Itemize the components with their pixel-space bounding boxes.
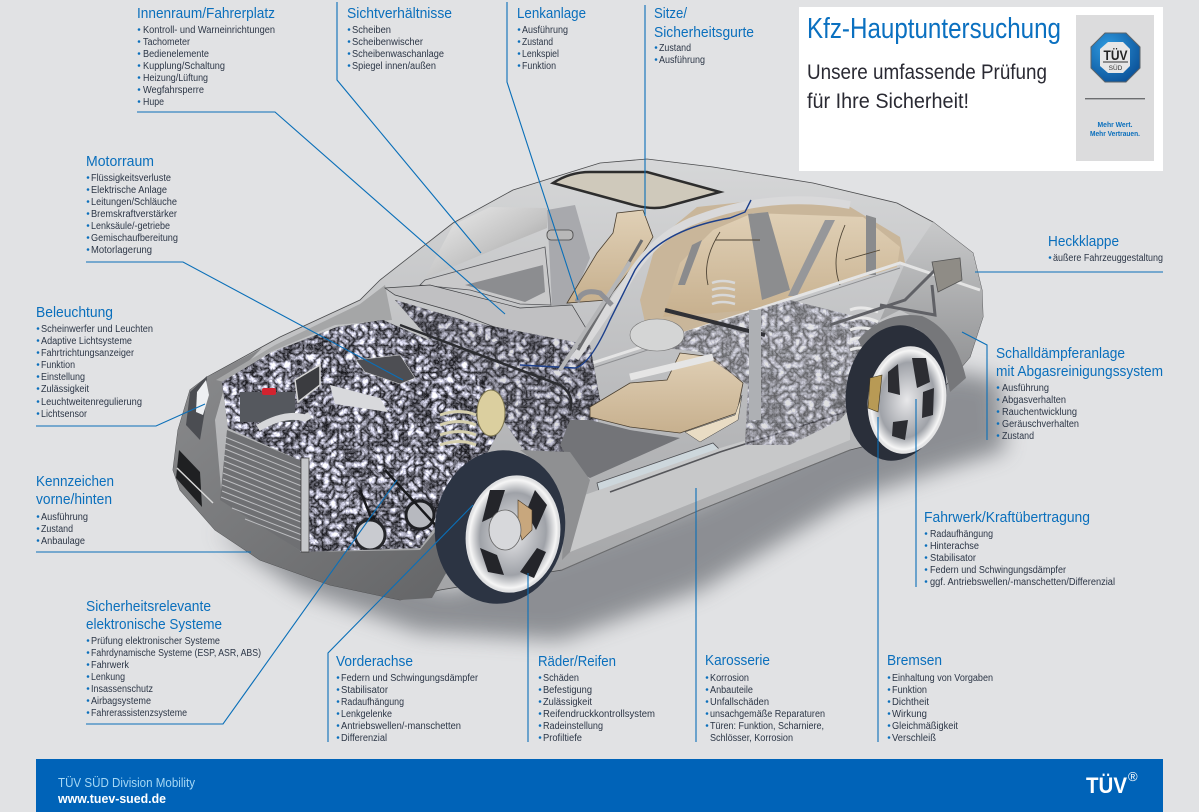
panel: Räder/Reifen: Befestigung — [543, 685, 592, 696]
panel: Schalldämpferanlage: Abgasverhalten — [1002, 395, 1066, 406]
panel: Lenkanlage — [517, 6, 586, 72]
rear rim — [862, 342, 952, 458]
panel: Sicherheitsrelevante elektronische Systeme: Fahrwerk — [91, 660, 130, 671]
panel: Innenraum/Fahrerplatz: Heizung/Lüftung — [143, 73, 208, 84]
panel: Fahrwerk/Kraftübertragung: Stabilisator — [930, 553, 977, 564]
floor pan — [560, 420, 680, 478]
radiator — [220, 430, 304, 552]
white box — [799, 7, 1163, 171]
panel: Fahrwerk/Kraftübertragung: Hinterachse — [930, 541, 979, 552]
panel: Motorraum: Flüssigkeitsverluste — [91, 173, 171, 184]
heading: Karosserie — [705, 653, 770, 669]
rocker cover — [356, 355, 415, 384]
intake pipe — [258, 415, 310, 428]
registered mark: ® — [1128, 769, 1138, 784]
panel: Beleuchtung: Scheinwerfer und Leuchten — [41, 324, 153, 335]
division text: TÜV SÜD Division Mobility — [58, 775, 195, 790]
near side mirror — [630, 319, 684, 351]
heading line 2: vorne/hinten — [36, 492, 112, 508]
panel: Innenraum/Fahrerplatz: Hupe — [143, 97, 164, 108]
panel: Räder/Reifen: Schäden — [543, 673, 579, 684]
front air intake — [176, 450, 202, 507]
panel: Sichtverhältnisse — [347, 6, 452, 72]
panel: Beleuchtung: Zulässigkeit — [41, 384, 89, 395]
panel: Beleuchtung: Fahrtrichtungsanzeiger — [41, 348, 135, 359]
seat base trim — [685, 395, 742, 442]
panel: Sichtverhältnisse: Spiegel innen/außen — [352, 61, 436, 72]
rear spoke openings — [888, 358, 934, 440]
rear greenhouse opening — [640, 198, 905, 345]
side skirt — [570, 410, 850, 552]
heading line 1: Kennzeichen — [36, 474, 114, 490]
car ground shadow — [215, 370, 1005, 640]
front wheel — [425, 442, 575, 612]
panel: Sicherheitsrelevante elektronische Systeme: Fahrerassistenzsysteme — [91, 708, 187, 719]
panel: Karosserie: Türen: Funktion, Scharniere, — [710, 721, 824, 732]
panel: Vorderachse: Lenkgelenke — [341, 709, 392, 720]
heading line 1: Sitze/ — [654, 6, 688, 22]
dashboard — [385, 285, 590, 350]
heading line 2: mit Abgasreinigungssystem — [996, 364, 1163, 380]
panel: Bremsen: Dichtheit — [892, 697, 929, 708]
heading: Vorderachse — [336, 654, 413, 670]
propeller tube — [630, 357, 713, 377]
near front seat — [590, 353, 743, 433]
rear quarter panel — [880, 222, 983, 383]
panel: Beleuchtung: Funktion — [41, 360, 75, 371]
panel: Räder/Reifen — [538, 654, 655, 744]
panel: Karosserie: Korrosion — [710, 673, 749, 684]
front bumper and nose — [173, 348, 480, 600]
footer band — [36, 759, 1163, 812]
panel: Innenraum/Fahrerplatz: Kontroll- und Warneinrichtungen — [143, 25, 275, 36]
panel: Bremsen: Verschleiß — [892, 733, 936, 744]
claim line 2: Mehr Vertrauen. — [1090, 131, 1140, 138]
alternator pulley — [355, 520, 385, 550]
hood rim — [216, 285, 392, 382]
icon: TÜV SÜD octagon logo — [1091, 33, 1140, 82]
panel: Sichtverhältnisse: Scheiben — [352, 25, 391, 36]
front tyre — [425, 442, 575, 612]
cowl texture — [395, 300, 600, 452]
panel: Sicherheitsrelevante elektronische Systeme — [86, 599, 261, 719]
panel: Schalldämpferanlage: Ausführung — [1002, 383, 1049, 394]
front spoke openings — [480, 490, 547, 578]
heading line 2: Sicherheitsgurte — [654, 25, 754, 41]
A pillar and blue cable — [520, 200, 850, 370]
panel: Schalldämpferanlage: Zustand — [1002, 431, 1034, 442]
far door inset — [465, 265, 545, 302]
panel: Heckklappe — [1048, 234, 1163, 264]
panel: Sitze/Sicherheitsgurte — [654, 6, 754, 66]
panel: Motorraum: Bremskraftverstärker — [91, 209, 178, 220]
panel: Fahrwerk/Kraftübertragung: Federn und Schwingungsdämpfer — [930, 565, 1067, 576]
icon: TÜV SÜD octagon logo: SÜD — [1109, 64, 1123, 72]
panel: Sicherheitsrelevante elektronische Systeme: Insassenschutz — [91, 684, 153, 695]
panel: Sicherheitsrelevante elektronische Systeme: Prüfung elektronischer Systeme — [91, 636, 220, 647]
divider — [1085, 98, 1145, 99]
panel: Motorraum: Elektrische Anlage — [91, 185, 167, 196]
drive belt — [360, 470, 440, 530]
far pillar — [547, 205, 590, 305]
headlight glass — [196, 380, 209, 415]
panel: Karosserie: Schlösser, Korrosion — [710, 733, 793, 744]
panel: Bremsen: Gleichmäßigkeit — [892, 721, 958, 732]
panel: Karosserie: Anbauteile — [710, 685, 753, 696]
panel: Bremsen: Einhaltung von Vorgaben — [892, 673, 993, 684]
panel: Fahrwerk/Kraftübertragung — [924, 510, 1115, 588]
panel: Vorderachse: Antriebswellen/-manschetten — [341, 721, 461, 732]
car body silhouette — [173, 159, 983, 600]
heading: Heckklappe — [1048, 234, 1119, 250]
heading: Räder/Reifen — [538, 654, 616, 670]
lower body edge — [562, 450, 850, 570]
exhaust link — [830, 270, 935, 325]
panel: Kennzeichen: Ausführung — [41, 512, 88, 523]
panel: Sitze/Sicherheitsgurte: Zustand — [659, 43, 691, 54]
steering wheel — [577, 292, 612, 305]
panel: Bremsen: Funktion — [892, 685, 927, 696]
panel: Räder/Reifen: Reifendruckkontrollsystem — [543, 709, 655, 720]
panel: Beleuchtung: Lichtsensor — [41, 409, 88, 420]
panel: Kennzeichen — [36, 474, 114, 547]
centre cross member — [749, 310, 761, 420]
rear seats — [663, 213, 900, 317]
panel: Räder/Reifen: Profiltiefe — [543, 733, 582, 744]
panel: Vorderachse: Federn und Schwingungsdämpfer — [341, 673, 479, 684]
far drive shaft — [665, 310, 765, 335]
rear coil spring — [850, 308, 878, 352]
heading: Motorraum — [86, 154, 154, 170]
middle running gear — [672, 300, 880, 445]
panel: Schalldämpferanlage — [996, 346, 1163, 442]
panel: Beleuchtung — [36, 305, 153, 420]
panel: Heckklappe: äußere Fahrzeuggestaltung — [1053, 253, 1163, 264]
front hub — [489, 510, 521, 550]
panel: Räder/Reifen: Zulässigkeit — [543, 697, 592, 708]
front strut spring — [440, 412, 476, 445]
panel: Schalldämpferanlage: Geräuschverhalten — [1002, 419, 1079, 430]
cylinder head — [330, 385, 388, 412]
panel: Sicherheitsrelevante elektronische Systeme: Fahrdynamische Systeme (ESP, ASR, ABS) — [91, 648, 261, 659]
logo panel — [1076, 15, 1154, 161]
panel: Bremsen — [887, 653, 993, 744]
website: www.tuev-sued.de — [57, 791, 166, 806]
heading: Sichtverhältnisse — [347, 6, 452, 22]
panel: Bremsen: Wirkung — [892, 709, 927, 720]
panel: Sichtverhältnisse: Scheibenwischer — [352, 37, 424, 48]
subtitle line 2: für Ihre Sicherheit! — [807, 90, 969, 113]
panel: Sitze/Sicherheitsgurte: Ausführung — [659, 55, 705, 66]
panel: Beleuchtung: Adaptive Lichtsysteme — [41, 336, 132, 347]
heading line 1: Sicherheitsrelevante — [86, 599, 211, 615]
panel: Kennzeichen: Anbaulage — [41, 536, 85, 547]
panel: Sicherheitsrelevante elektronische Systeme: Airbagsysteme — [91, 696, 151, 707]
title: Kfz-Hauptuntersuchung — [807, 13, 1061, 45]
windscreen and far side glass — [425, 207, 547, 278]
panel: Fahrwerk/Kraftübertragung: Radaufhängung — [930, 529, 993, 540]
beltline trim — [580, 263, 980, 367]
panel: Innenraum/Fahrerplatz — [137, 6, 275, 108]
panel: Motorraum: Gemischaufbereitung — [91, 233, 178, 244]
heading: Innenraum/Fahrerplatz — [137, 6, 275, 22]
rear brake caliper — [868, 375, 882, 412]
running gear texture — [672, 300, 880, 445]
battery — [240, 392, 295, 422]
footer background — [36, 759, 1163, 812]
engine bay — [215, 315, 510, 555]
panel: Karosserie: Unfallschäden — [710, 697, 769, 708]
side skirt line — [610, 412, 845, 492]
panel: Vorderachse: Stabilisator — [341, 685, 389, 696]
battery cap — [262, 388, 276, 395]
cowl and firewall mechanics — [395, 300, 600, 452]
heading: Lenkanlage — [517, 6, 586, 22]
cowl base — [395, 300, 600, 452]
panel: Lenkanlage: Funktion — [522, 61, 556, 72]
panel: title box — [799, 7, 1163, 171]
radiator fins — [221, 437, 304, 541]
front fender — [520, 450, 590, 560]
panel: Beleuchtung: Leuchtweitenregulierung — [41, 397, 142, 408]
panel: Lenkanlage: Zustand — [522, 37, 553, 48]
belt pulley — [406, 501, 434, 529]
far door panel — [420, 247, 551, 305]
footer TÜV wordmark: TÜV — [1086, 773, 1127, 798]
icon: TÜV SÜD octagon logo: TÜV — [1104, 47, 1128, 63]
panel: Innenraum/Fahrerplatz: Tachometer — [143, 37, 191, 48]
rear tyre — [837, 319, 955, 467]
headlight — [186, 376, 207, 440]
panel: Motorraum: Motorlagerung — [91, 245, 152, 256]
panel: Innenraum/Fahrerplatz: Wegfahrsperre — [143, 85, 204, 96]
rear wheel arch — [858, 315, 966, 392]
far suspension — [712, 281, 735, 304]
panel: Fahrwerk/Kraftübertragung: ggf. Antriebswellen/-manschetten/Differenzial — [930, 577, 1115, 588]
lower bumper trim — [177, 468, 213, 503]
seat belts and pillar — [678, 212, 880, 300]
interior mirror — [547, 230, 573, 240]
claim line 1: Mehr Wert. — [1098, 122, 1133, 129]
panel: Vorderachse — [336, 654, 479, 744]
tail lamp unit — [932, 258, 962, 292]
panel: Räder/Reifen: Radeinstellung — [543, 721, 603, 732]
panel: Kennzeichen: Zustand — [41, 524, 73, 535]
panel: Vorderachse: Radaufhängung — [341, 697, 404, 708]
panel: Lenkanlage: Ausführung — [522, 25, 568, 36]
heading line 1: Schalldämpferanlage — [996, 346, 1125, 362]
radiator support post — [301, 458, 309, 552]
heading: Fahrwerk/Kraftübertragung — [924, 510, 1090, 526]
panel: Schalldämpferanlage: Rauchentwicklung — [1002, 407, 1077, 418]
rear wheel — [837, 319, 955, 467]
panel: Motorraum: Lenksäule/-getriebe — [91, 221, 170, 232]
panel: Motorraum — [86, 154, 178, 256]
engine dark base — [215, 315, 510, 555]
front brake caliper — [518, 500, 532, 540]
brake booster pulley — [477, 390, 505, 436]
door sill — [597, 443, 720, 495]
panel: Sichtverhältnisse: Scheibenwaschanlage — [352, 49, 444, 60]
air duct — [295, 365, 320, 402]
panel: Motorraum: Leitungen/Schläuche — [91, 197, 177, 208]
front rim — [458, 469, 568, 599]
panel: Innenraum/Fahrerplatz: Kupplung/Schaltung — [143, 61, 225, 72]
illustration: cutaway car — [173, 159, 1005, 640]
far front seat — [567, 210, 653, 303]
subtitle line 1: Unsere umfassende Prüfung — [807, 61, 1047, 84]
panel: Karosserie — [705, 653, 825, 744]
panel: Lenkanlage: Lenkspiel — [522, 49, 559, 60]
panel: Beleuchtung: Einstellung — [41, 372, 85, 383]
engine metallic texture — [215, 315, 510, 555]
panel: Karosserie: unsachgemäße Reparaturen — [710, 709, 825, 720]
panel: Innenraum/Fahrerplatz: Bedienelemente — [143, 49, 209, 60]
heading: Bremsen — [887, 653, 942, 669]
sunroof — [553, 172, 720, 208]
panel: Vorderachse: Differenzial — [341, 733, 387, 744]
panel: Sicherheitsrelevante elektronische Systeme: Lenkung — [91, 672, 125, 683]
heading line 2: elektronische Systeme — [86, 617, 222, 633]
heading: Beleuchtung — [36, 305, 113, 321]
cowl tube — [400, 325, 571, 410]
